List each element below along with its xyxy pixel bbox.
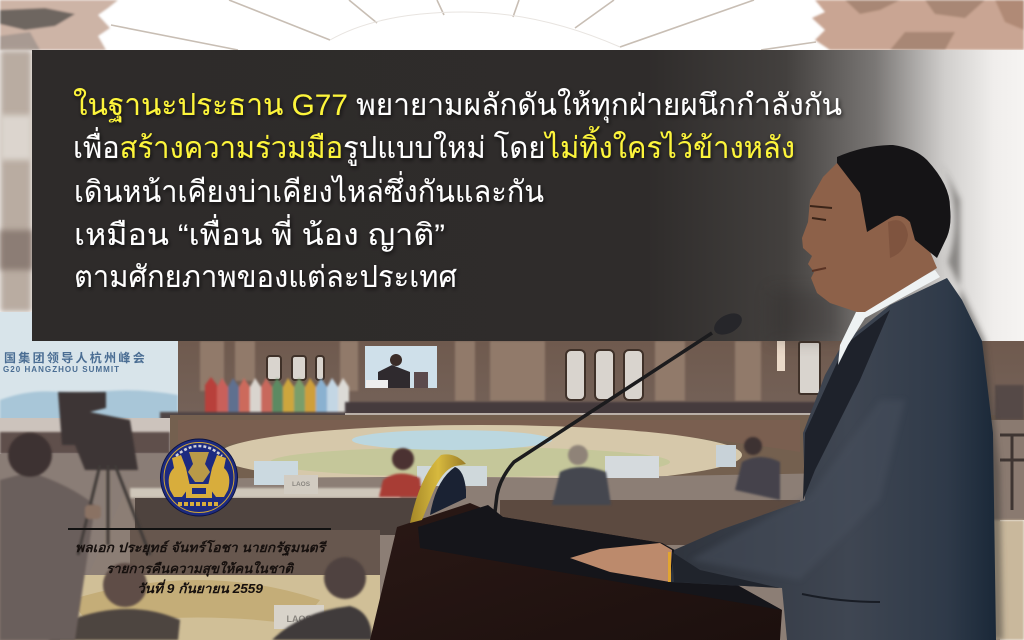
desks and floor	[60, 470, 1000, 640]
podium gold ornament	[410, 454, 466, 523]
hand	[570, 543, 672, 582]
left blue banner	[0, 312, 180, 437]
arched windows	[267, 342, 820, 400]
hall wall	[178, 341, 1024, 426]
line 5: ตามศักยภาพของแต่ละประเทศ	[74, 261, 457, 294]
hair	[837, 145, 951, 258]
main video screen	[365, 346, 437, 388]
laptops and nameplates: LAOS	[292, 481, 311, 488]
ear	[888, 220, 908, 258]
line 4: เหมือน “เพื่อน พี่ น้อง ญาติ”	[74, 214, 445, 252]
seated delegates	[48, 437, 780, 640]
sleeve highlight	[690, 400, 905, 580]
ceiling ribs	[111, 0, 816, 50]
left delegates behind camera	[0, 418, 170, 468]
ceiling brown corner left	[0, 0, 118, 50]
delegate row	[345, 402, 855, 415]
soft shadow around figure	[940, 160, 1003, 640]
laptops and nameplates: LAOS	[286, 614, 312, 624]
dark lower panel shade	[770, 290, 840, 341]
suit body	[670, 278, 996, 640]
headline text block	[73, 88, 842, 294]
caption text	[75, 539, 327, 596]
speaker figure	[570, 145, 1003, 640]
government emblem	[160, 439, 238, 516]
ceiling brown corner right	[812, 0, 1024, 50]
facial features	[810, 206, 832, 271]
right edge room	[995, 385, 1024, 420]
microphone	[482, 309, 745, 544]
emblem lions	[169, 455, 229, 497]
caption line 1: พลเอก ประยุทธ์ จันทร์โอชา นายกรัฐมนตรี	[75, 539, 327, 557]
line 3: เดินหน้าเคียงบ่าเคียงไหล่ซึ่งกันและกัน	[74, 171, 544, 209]
left strip beside panel	[0, 50, 32, 312]
emblem vase	[188, 452, 210, 482]
caption line 2: รายการคืนความสุขให้คนในชาติ	[106, 561, 295, 577]
podium	[370, 454, 782, 640]
suit cuff shadow	[672, 552, 780, 588]
caption line 3: วันที่ 9 กันยายน 2559	[137, 579, 264, 596]
background: conference hall photo: G20 HANGZHOU SUMMIT	[3, 365, 119, 374]
laptops and nameplates	[254, 445, 736, 629]
background: conference hall photo: 国集团领导人杭州峰会	[4, 350, 147, 365]
caption divider	[68, 528, 331, 530]
line 1: ในฐานะประธาน G77 พยายามผลักดันให้ทุกฝ่ายผนึกกำลังกัน	[73, 88, 842, 124]
flags	[205, 377, 349, 420]
line 2: เพื่อสร้างความร่วมมือรูปแบบใหม่ โดยไม่ทิ้งใครไว้ข้างหลัง	[73, 126, 795, 166]
shirt collar	[838, 270, 940, 365]
dark translucent text panel	[32, 50, 1024, 341]
lapel	[803, 310, 890, 500]
pocket	[802, 594, 880, 602]
round table ring	[170, 415, 1024, 505]
neck and face	[802, 163, 937, 312]
camera operator	[0, 392, 150, 640]
